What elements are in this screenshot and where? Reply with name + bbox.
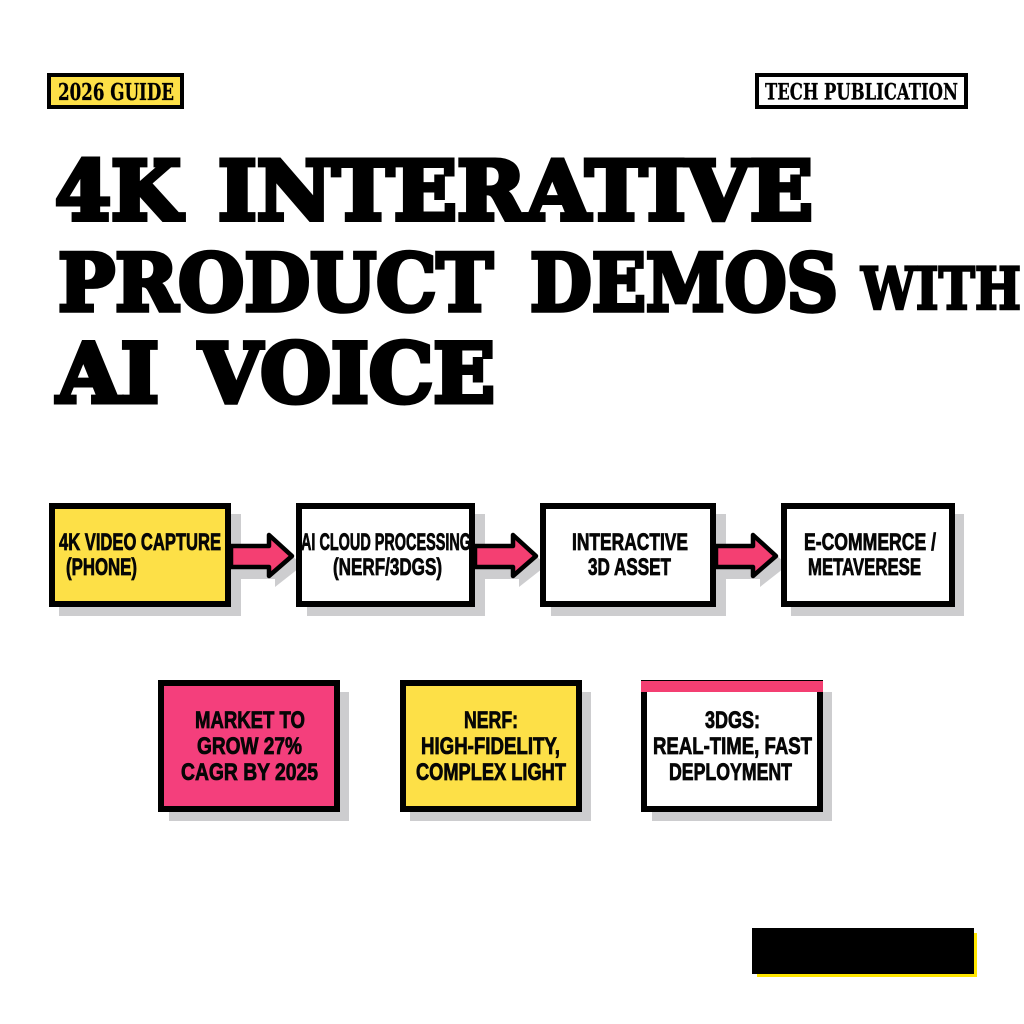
flow step: interactive 3D asset: 3D ASSET [588,554,671,581]
flow step: AI cloud processing [299,506,485,616]
title: INTERATIVE [218,144,813,240]
flow step: interactive 3D asset [543,506,726,616]
title: 4K [55,144,184,240]
title: AI [56,327,159,422]
flow step: AI cloud processing: (NERF/3DGS) [333,554,442,581]
flow step: e-commerce / metaverese: E-COMMERCE / [804,529,936,556]
stat card: NeRF: COMPLEX LIGHT [416,759,566,786]
stat card: 3DGS [641,681,832,821]
title: VOICE [198,327,495,422]
flow step: 4K video capture: 4K VIDEO CAPTURE [59,529,221,556]
flow step: interactive 3D asset: INTERACTIVE [572,529,688,556]
badge: tech publication [757,75,966,107]
flow step: AI cloud processing: AI CLOUD PROCESSING [301,529,471,556]
stat card: NeRF: NERF: [464,707,518,734]
badge: 2026 guide: 2026 GUIDE [58,79,174,106]
stat card: 3DGS: 3DGS: [705,707,760,734]
title [55,144,1021,422]
flow step: e-commerce / metaverese [784,506,964,616]
stat card: market growth: GROW 27% [197,733,302,760]
badge: 2026 guide [49,75,182,107]
title: DEMOS [530,236,838,330]
stat card: market growth: CAGR BY 2025 [181,759,318,786]
stat card: market growth: MARKET TO [195,707,305,734]
arrow: capture to processing [231,535,303,587]
stat card: 3DGS: REAL-TIME, FAST [653,733,812,760]
stat card: 3DGS: DEPLOYMENT [669,759,792,786]
flow step: 4K video capture [52,506,241,616]
stat card: NeRF: HIGH-FIDELITY, [421,733,560,760]
stat card: NeRF [403,683,591,821]
title: PRODUCT [58,236,493,330]
stat card: market growth [161,683,349,821]
arrow: processing to asset [475,535,547,587]
black footer block [752,928,977,977]
badge: tech publication: TECH PUBLICATION [765,80,958,106]
flow step: 4K video capture: (PHONE) [66,554,137,581]
arrow: asset to e-commerce [716,535,788,587]
flow step: e-commerce / metaverese: METAVERESE [808,554,921,581]
